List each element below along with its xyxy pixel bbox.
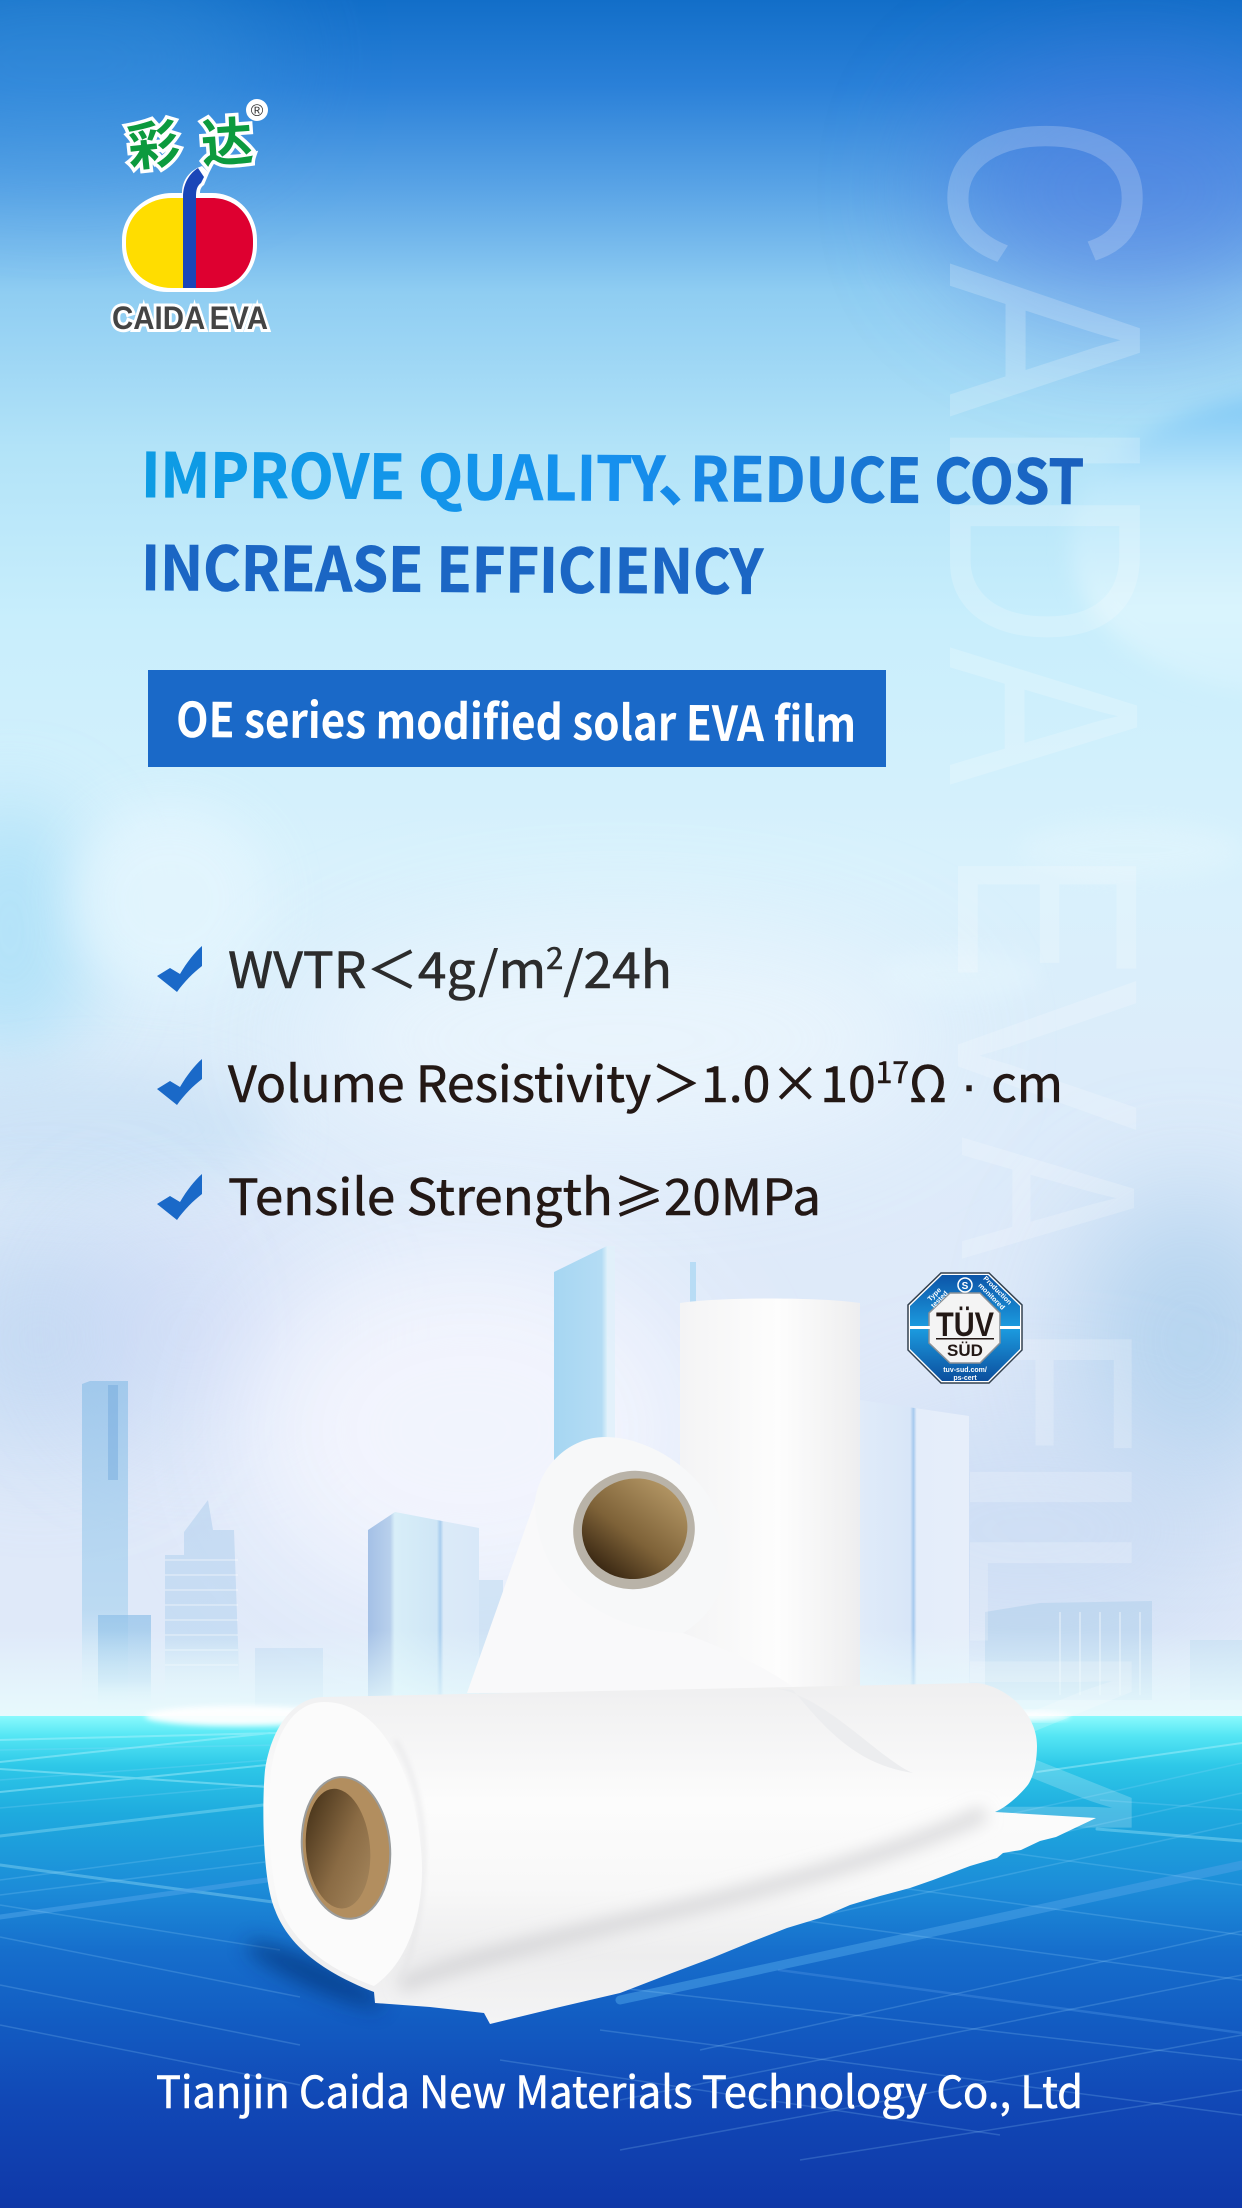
skyscraper left	[82, 1381, 128, 1706]
icon: check	[157, 1059, 202, 1105]
logo: apple mark	[122, 166, 257, 292]
title line 1: 、	[658, 430, 720, 519]
watermark: vertical CAIDA EVA FILM: I	[891, 412, 1199, 489]
TUV SUD badge: tuv-sud.com/	[943, 1367, 987, 1374]
TUV SUD badge: monitored	[976, 1282, 1006, 1312]
product banner	[148, 670, 886, 767]
watermark: vertical CAIDA EVA FILM: C	[891, 115, 1199, 270]
main film roll	[263, 1683, 1096, 2024]
feature: WVTR: /24h	[563, 931, 672, 1003]
glass building	[368, 1512, 479, 1705]
title line 1	[141, 426, 1084, 522]
watermark: vertical CAIDA EVA FILM: A	[891, 263, 1199, 418]
watermark: vertical CAIDA EVA FILM: D	[891, 487, 1199, 648]
title line 1: IMPROVE QUALITY	[141, 426, 666, 519]
title line 1: REDUCE COST	[690, 430, 1084, 522]
watermark: vertical CAIDA EVA FILM: A	[892, 647, 1196, 786]
logo: brand characters: 彩	[123, 101, 183, 182]
watermark: vertical CAIDA EVA FILM: L	[920, 1524, 1183, 1648]
logo: registered mark: ®	[251, 101, 264, 120]
minor grid lines	[0, 1745, 1242, 2160]
watermark: vertical CAIDA EVA FILM: M	[920, 1641, 1183, 1848]
logo: wordmark: CAIDA EVA	[112, 300, 268, 336]
tall glass building	[554, 1246, 607, 1500]
roll end face edge	[395, 1740, 423, 1983]
roll core	[296, 1773, 396, 1922]
film fold	[770, 1688, 913, 1773]
watermark: vertical CAIDA EVA FILM	[891, 115, 1199, 1848]
TUV SUD badge: ps-cert	[953, 1375, 977, 1382]
roll end face	[269, 1702, 422, 1986]
feature: WVTR: WVTR＜4g/m	[228, 931, 537, 1003]
title	[141, 426, 1084, 612]
upright film roll	[680, 1298, 860, 1690]
construction tower	[165, 1500, 240, 1700]
logo: brand characters: 达	[198, 99, 255, 178]
icon: check	[157, 946, 202, 992]
TUV SUD badge: S	[962, 1281, 969, 1292]
title line 2: INCREASE EFFICIENCY	[141, 519, 764, 612]
horizon glow	[145, 1706, 1070, 1726]
feature: WVTR: 2	[546, 934, 563, 978]
film crease shading	[400, 1813, 985, 1985]
TUV SUD badge: tested	[930, 1290, 950, 1310]
feature: volume resistivity: 17	[876, 1048, 909, 1092]
TUV SUD badge	[908, 1273, 1022, 1383]
city skyline	[0, 1246, 1242, 1718]
TUV SUD badge: TÜV	[936, 1306, 994, 1344]
feature: volume resistivity: Ω	[909, 1045, 947, 1117]
floor	[0, 1716, 1242, 2208]
TUV SUD badge: SÜD	[947, 1341, 983, 1360]
feature: WVTR	[157, 931, 672, 1003]
watermark: vertical CAIDA EVA FILM: E	[903, 850, 1192, 981]
company name footer: Tianjin Caida New Materials Technology Co., Ltd	[156, 2057, 1083, 2121]
watermark: vertical CAIDA EVA FILM: V	[903, 980, 1192, 1132]
feature: volume resistivity: · cm	[961, 1045, 1063, 1117]
feature list	[157, 931, 1063, 1230]
logo: registered mark	[246, 99, 268, 121]
feature: volume resistivity: Volume Resistivity＞1.0×10	[228, 1045, 876, 1117]
far right buildings	[985, 1601, 1152, 1700]
middle film roll	[467, 1437, 793, 1693]
icon: check	[157, 1174, 202, 1220]
watermark: vertical CAIDA EVA FILM: I	[920, 1442, 1183, 1532]
major grid lines	[0, 1733, 1242, 2033]
main roll shadow	[241, 1933, 389, 2017]
glass building right	[860, 1400, 969, 1700]
feature: tensile strength: Tensile Strength≥20MPa	[228, 1158, 821, 1230]
roll core	[558, 1455, 710, 1605]
TUV SUD badge: Production	[982, 1275, 1013, 1306]
TUV SUD badge: Type	[927, 1287, 943, 1303]
background sky	[0, 0, 1242, 1720]
logo: brand characters	[123, 99, 255, 182]
banner text: OE series modified solar EVA film	[176, 681, 856, 756]
logo	[112, 99, 268, 336]
watermark: vertical CAIDA EVA FILM: F	[920, 1321, 1183, 1457]
watermark: vertical CAIDA EVA FILM: A	[909, 1137, 1188, 1259]
